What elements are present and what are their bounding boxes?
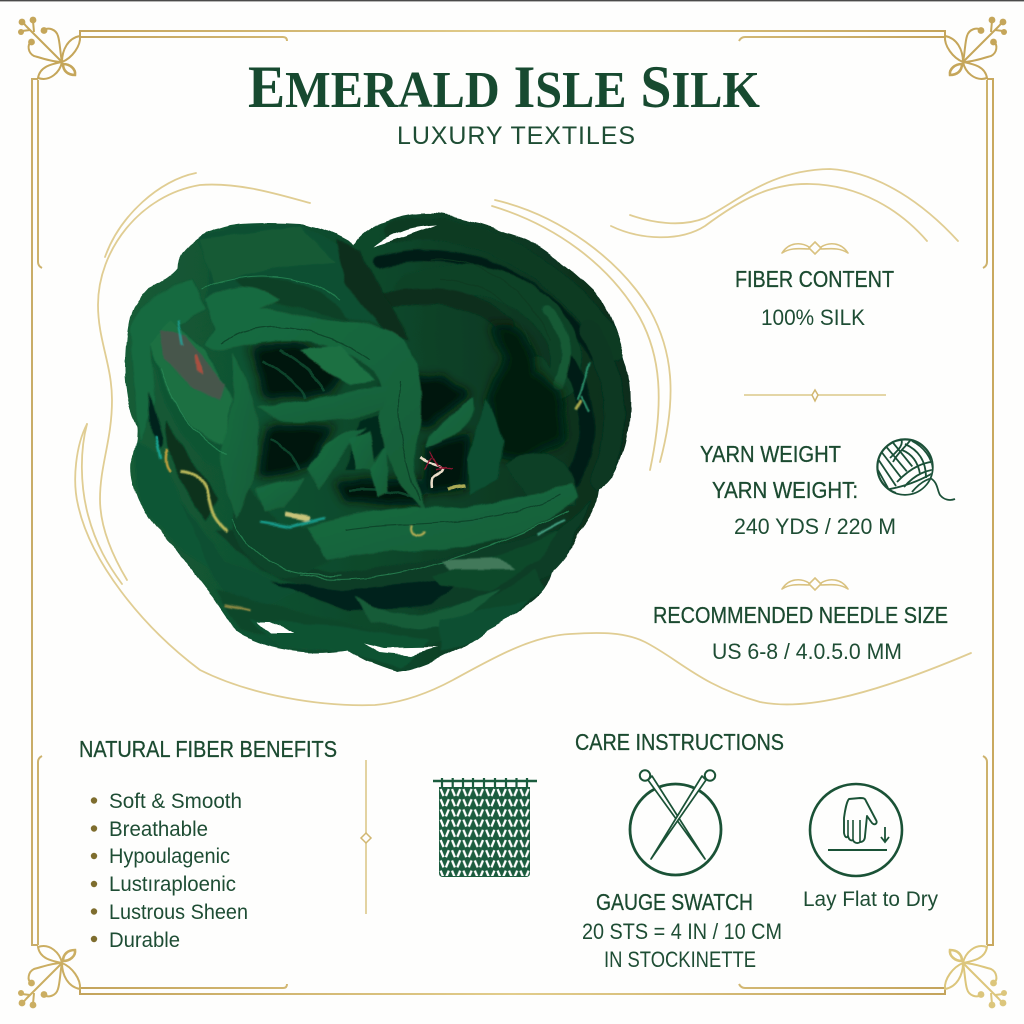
streaks in the hollows (262, 350, 415, 498)
yarn weight block (700, 441, 896, 539)
icon: knitted swatch (433, 778, 537, 877)
icon: lay flat hand (810, 784, 902, 876)
fiber content block: FIBER CONTENT (735, 266, 894, 292)
yarn skein photo (120, 205, 635, 675)
lay flat caption: Lay Flat to Dry (803, 888, 938, 911)
flourish above needle size (782, 578, 848, 590)
yarn weight block: YARN WEIGHT: (712, 477, 858, 503)
divider (744, 390, 886, 401)
fiber content block (735, 266, 894, 330)
flourish above fiber content (782, 242, 848, 254)
needle size block (653, 602, 948, 664)
gauge swatch text: IN STOCKINETTE (604, 947, 756, 972)
dark hollows between ribbons (250, 342, 470, 505)
yarn weight block: 240 YDS / 220 M (734, 514, 896, 539)
vertical divider (361, 760, 371, 914)
title: EMERALD ISLE SILK (248, 54, 761, 120)
subtitle: LUXURY TEXTILES (397, 122, 635, 150)
gauge swatch text: GAUGE SWATCH (596, 889, 753, 915)
needle size block: US 6-8 / 4.0.5.0 MM (712, 639, 902, 664)
icon: yarn ball (877, 438, 955, 500)
panel: natural fiber benefits: Durable (109, 929, 180, 952)
corner flourish: bottom right (945, 946, 1007, 1008)
panel: natural fiber benefits: Hypoulagenic (109, 845, 230, 868)
panel: natural fiber benefits: Soft & Smooth (109, 790, 242, 813)
skein base (120, 205, 635, 675)
corner flourish: bottom left (18, 946, 80, 1008)
ribbon fold lines (220, 260, 560, 530)
heading: NATURAL FIBER BENEFITS (79, 736, 337, 762)
left folds (130, 280, 300, 610)
bullet list (91, 797, 97, 942)
gaps in the skein (373, 225, 437, 247)
yarn weight block: YARN WEIGHT (700, 441, 841, 467)
lower left dark ribbon (233, 490, 330, 577)
panel: natural fiber benefits: Lustıraploenic (109, 873, 236, 896)
needle size block: RECOMMENDED NEEDLE SIZE (653, 602, 948, 628)
bright ribbons (205, 287, 578, 560)
corner flourish: top left (18, 17, 80, 79)
icon: knitting needles (630, 770, 721, 875)
panel: natural fiber benefits: Breathable (109, 818, 208, 841)
fiber content block: 100% SILK (761, 305, 865, 330)
corner flourish: top right (945, 17, 1007, 79)
panel: natural fiber benefits: Lustrous Sheen (109, 901, 248, 924)
gauge swatch text: 20 STS = 4 IN / 10 CM (582, 919, 782, 944)
decorative swirls around the yarn (75, 169, 971, 705)
panel: natural fiber benefits (79, 736, 337, 952)
upper left lobe (197, 225, 410, 340)
right lobe folds (380, 229, 615, 482)
fibres and colourful threads (155, 320, 590, 610)
gauge swatch text (582, 889, 782, 972)
lower bands (215, 500, 590, 668)
care instructions heading: CARE INSTRUCTIONS (575, 729, 784, 755)
